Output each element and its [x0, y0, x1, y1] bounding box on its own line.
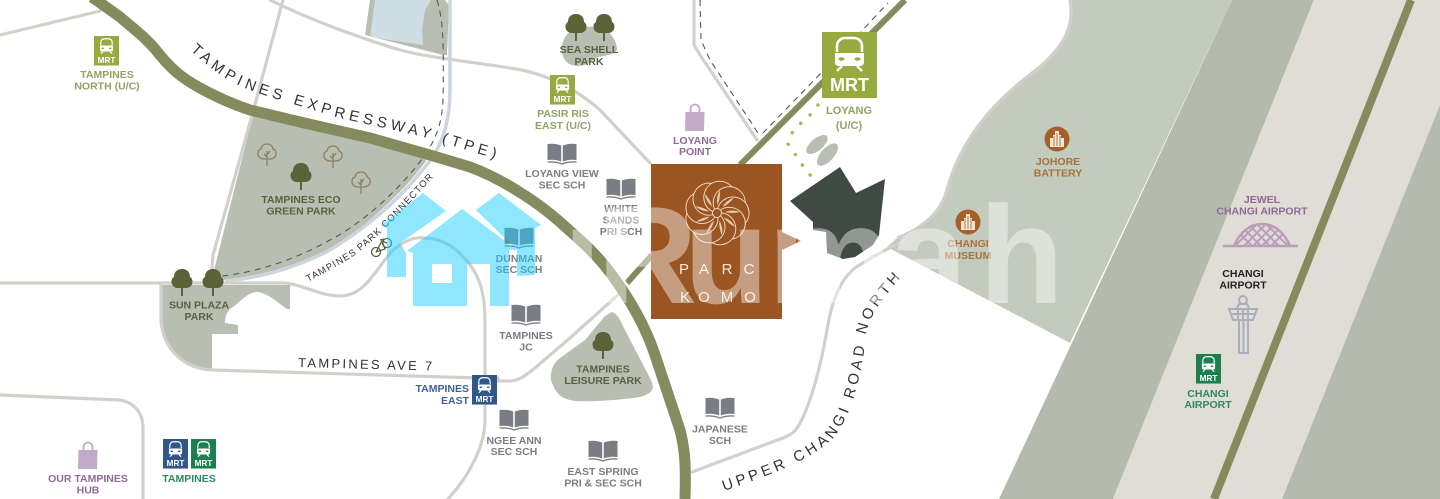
icon: Parc Komo flower logo [681, 179, 752, 249]
place labels: NORTH (U/C) [74, 80, 140, 92]
icon: Changi control tower [1229, 296, 1257, 353]
place labels: PARK [575, 56, 604, 68]
place labels: JAPANESE [692, 424, 748, 436]
place labels: EAST SPRING [567, 466, 639, 478]
footprints [803, 132, 842, 169]
place labels: TAMPINES [162, 473, 216, 485]
panel: Parc Komo marker [651, 164, 801, 319]
attraction icons [956, 126, 1070, 234]
place labels: AIRPORT [1219, 280, 1267, 292]
school icons [500, 144, 734, 461]
Parc Komo name: M [721, 289, 733, 306]
place labels: EAST [441, 395, 470, 407]
Parc Komo name: K [680, 289, 690, 306]
place labels: MUSEUM [945, 250, 992, 262]
place labels: CHANGI AIRPORT [1216, 206, 1308, 218]
watermark wordmark: iRumah [563, 178, 1064, 333]
road label: Upper Changi Road North: UPPER CHANGI ROAD NORTH [722, 272, 900, 490]
place labels: PRI & SEC SCH [564, 478, 642, 490]
icon: Tampines MRT blue [163, 439, 188, 469]
watermark house icon [381, 193, 541, 306]
place labels: LOYANG [673, 135, 717, 147]
place labels: SEC SCH [539, 180, 585, 192]
icon: Changi Airport MRT: MRT [1200, 374, 1217, 383]
icon: Tampines MRT green [191, 439, 216, 469]
place labels: (U/C) [836, 120, 862, 132]
place labels: EAST (U/C) [535, 120, 591, 132]
place labels: AIRPORT [1184, 399, 1232, 411]
icon: Tampines North MRT [94, 36, 119, 66]
dotted walking route [788, 105, 818, 176]
icon: Pasir Ris East MRT: MRT [554, 95, 571, 104]
Parc Komo name: O [698, 289, 710, 306]
place labels: SCH [709, 435, 731, 447]
place labels: GREEN PARK [266, 206, 336, 218]
place labels: HUB [77, 484, 100, 496]
Parc Komo name: R [722, 261, 733, 278]
place labels: PRI SCH [600, 226, 642, 238]
place labels: SEC SCH [491, 446, 537, 458]
icon: Tampines MRT blue: MRT [167, 459, 184, 468]
icon: Tampines MRT green: MRT [195, 459, 212, 468]
icon: Changi Airport MRT [1196, 354, 1221, 384]
road label: Tampines Park Connector: TAMPINES PARK CONNECTOR [305, 174, 433, 281]
place labels: TAMPINES [416, 383, 469, 395]
place labels: SUN PLAZA [169, 300, 229, 312]
place labels: TAMPINES [499, 330, 553, 342]
place labels: CHANGI [947, 238, 989, 250]
icon: park connector bicycle [372, 238, 392, 256]
icon: Tampines North MRT: MRT [98, 56, 115, 65]
roads [0, 0, 905, 499]
place labels: SANDS [603, 214, 639, 226]
shopping icons [78, 104, 704, 469]
place labels: WHITE [604, 203, 638, 215]
icon: Tampines East MRT [472, 375, 497, 405]
place labels: OUR TAMPINES [48, 473, 128, 485]
Parc Komo name: A [699, 261, 709, 278]
place labels: JC [519, 342, 533, 354]
place labels: TAMPINES ECO [261, 194, 341, 206]
icon: Pasir Ris East MRT [550, 75, 575, 105]
place labels [48, 44, 1308, 496]
place labels: JEWEL [1244, 194, 1281, 206]
place labels: PASIR RIS [537, 108, 589, 120]
place labels: PARK [185, 311, 214, 323]
icon: Jewel Changi Airport dome [1223, 222, 1298, 246]
place labels: CHANGI [1187, 388, 1229, 400]
Parc Komo name: C [743, 261, 754, 278]
place labels: SEA SHELL [560, 44, 619, 56]
place labels: TAMPINES [80, 69, 134, 81]
parks and water [161, 0, 653, 401]
place labels: JOHORE [1036, 156, 1080, 168]
place labels: CHANGI [1222, 268, 1264, 280]
place labels: LOYANG VIEW [525, 168, 599, 180]
place labels: LOYANG [826, 105, 872, 117]
road label: Tampines Expressway: TAMPINES EXPRESSWAY (TPE) [193, 42, 496, 160]
Parc Komo name: O [744, 289, 756, 306]
trees [172, 14, 614, 359]
parc komo site shape [790, 167, 885, 259]
icon: Tampines East MRT: MRT [476, 395, 493, 404]
place labels: BATTERY [1034, 168, 1082, 180]
airport land [887, 0, 1440, 499]
Parc Komo name: P [679, 261, 689, 278]
place labels: SEC SCH [496, 264, 542, 276]
place labels: DUNMAN [496, 253, 542, 265]
place labels: NGEE ANN [486, 435, 542, 447]
place labels: LEISURE PARK [564, 375, 642, 387]
road label: Tampines Ave 7: TAMPINES AVE 7 [298, 355, 435, 374]
icon: Loyang MRT [822, 32, 877, 98]
place labels: TAMPINES [576, 364, 630, 376]
icon: Loyang MRT: MRT [830, 75, 869, 95]
place labels: POINT [679, 146, 712, 158]
